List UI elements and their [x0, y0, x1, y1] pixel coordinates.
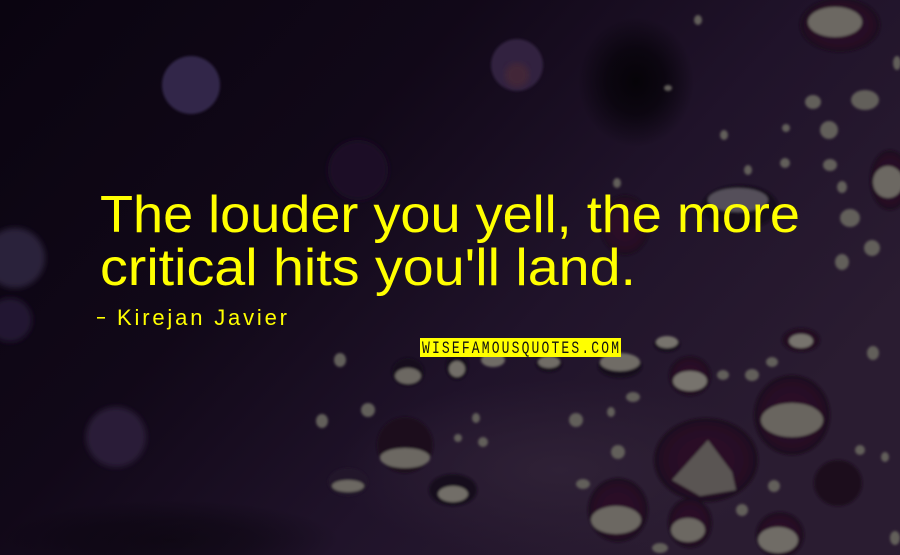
small water drops [316, 15, 900, 553]
quote text [100, 186, 800, 297]
quote line 2: critical hits you'll land. [100, 239, 636, 297]
author dash [97, 317, 105, 319]
bokeh lights [0, 39, 543, 467]
author name: Kirejan Javier [117, 305, 287, 330]
quote line 1: The louder you yell, the more [100, 186, 800, 244]
watermark banner: WISEFAMOUSQUOTES.COM [422, 338, 619, 359]
large water drops [328, 0, 900, 555]
